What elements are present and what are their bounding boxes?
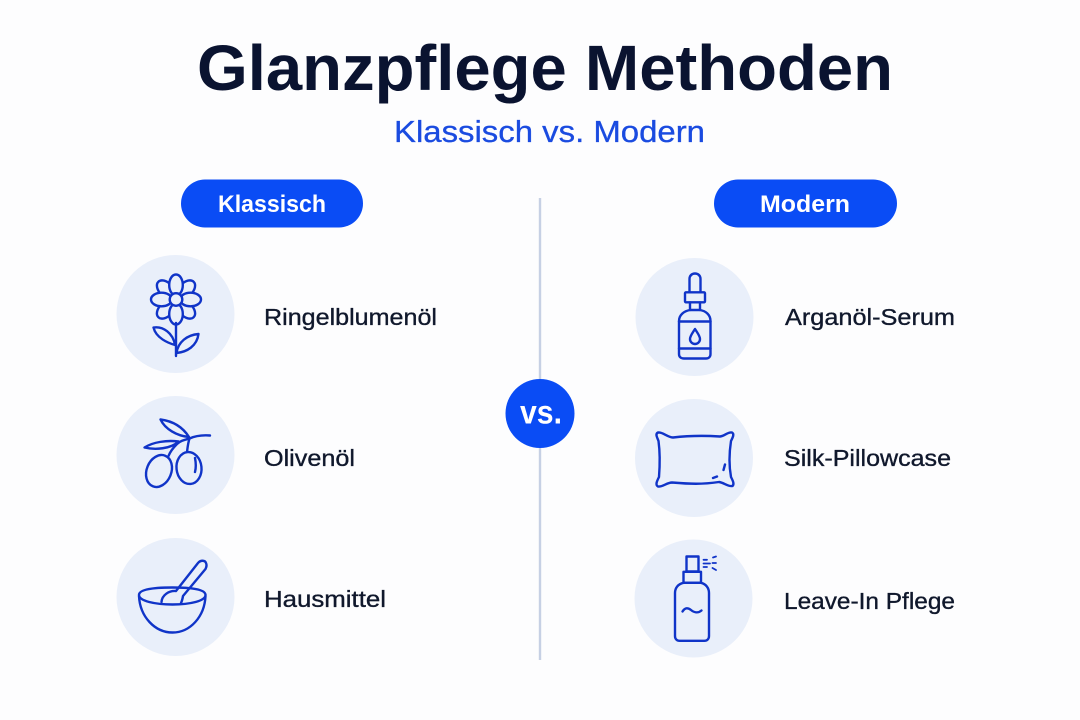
item: Arganöl-Serum <box>636 258 955 376</box>
icon: bowl and spoon <box>139 561 207 632</box>
badge: classic: Klassisch <box>218 191 326 218</box>
icon: olive branch <box>141 420 210 491</box>
icon: spray bottle <box>675 556 716 641</box>
badge: modern: Modern <box>760 191 850 218</box>
icon: pillow <box>656 432 733 487</box>
vs badge <box>506 379 574 448</box>
item: Hausmittel <box>116 538 386 656</box>
label: Ringelblumenöl <box>264 304 437 330</box>
vs badge: vs. <box>520 394 562 430</box>
center divider line <box>539 198 541 660</box>
label: Silk-Pillowcase <box>784 445 951 471</box>
item: Olivenöl <box>116 396 355 514</box>
icon: dropper bottle <box>679 274 710 358</box>
title: Glanzpflege Methoden <box>197 32 893 104</box>
item: Leave-In Pflege <box>634 540 955 658</box>
label: Leave-In Pflege <box>784 588 955 614</box>
label: Olivenöl <box>264 445 355 471</box>
label: Arganöl-Serum <box>785 304 955 330</box>
item: Ringelblumenöl <box>116 255 437 373</box>
label: Hausmittel <box>264 586 386 612</box>
subtitle: Klassisch vs. Modern <box>394 114 705 149</box>
badge: modern <box>714 180 897 228</box>
badge: classic <box>181 180 363 228</box>
icon: flower <box>151 274 201 356</box>
item: Silk-Pillowcase <box>635 399 951 517</box>
